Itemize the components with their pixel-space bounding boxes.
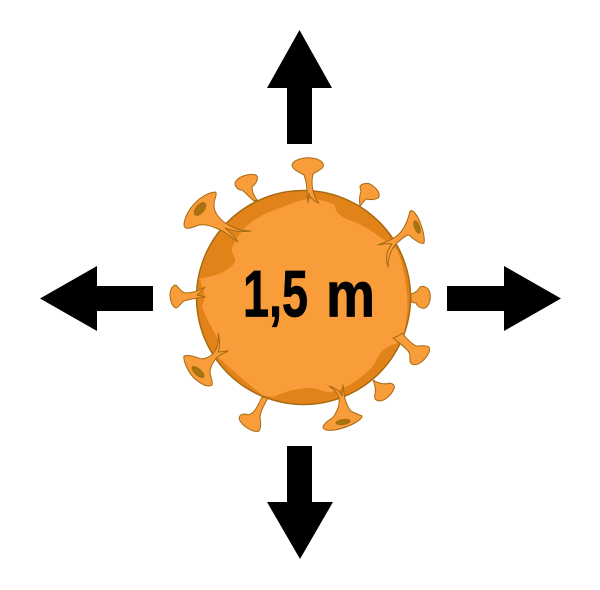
spike: right small [411, 286, 430, 308]
spike: top [292, 158, 323, 203]
label: 1,5 m: m [326, 258, 375, 330]
virus body [196, 190, 412, 406]
label: 1,5 m [243, 256, 375, 330]
spike: lower-right [393, 333, 430, 365]
spike: upper-left small [235, 174, 257, 201]
spike: lower-left large [184, 333, 228, 386]
arrow: left [40, 266, 153, 331]
spike: lower-right small [373, 380, 394, 401]
arrow: right [447, 266, 561, 331]
spike: upper-left large [184, 192, 251, 242]
arrow: down [267, 446, 333, 559]
spike: upper-right large [378, 211, 424, 267]
spike: bottom-left small [239, 397, 268, 431]
spike: upper-right small [360, 183, 379, 206]
label: 1,5 m: 1,5 [243, 256, 308, 330]
spike: bottom large [323, 385, 362, 430]
arrow: up [267, 30, 332, 144]
spike: left small [170, 285, 205, 308]
icon: orange virus [170, 158, 430, 431]
